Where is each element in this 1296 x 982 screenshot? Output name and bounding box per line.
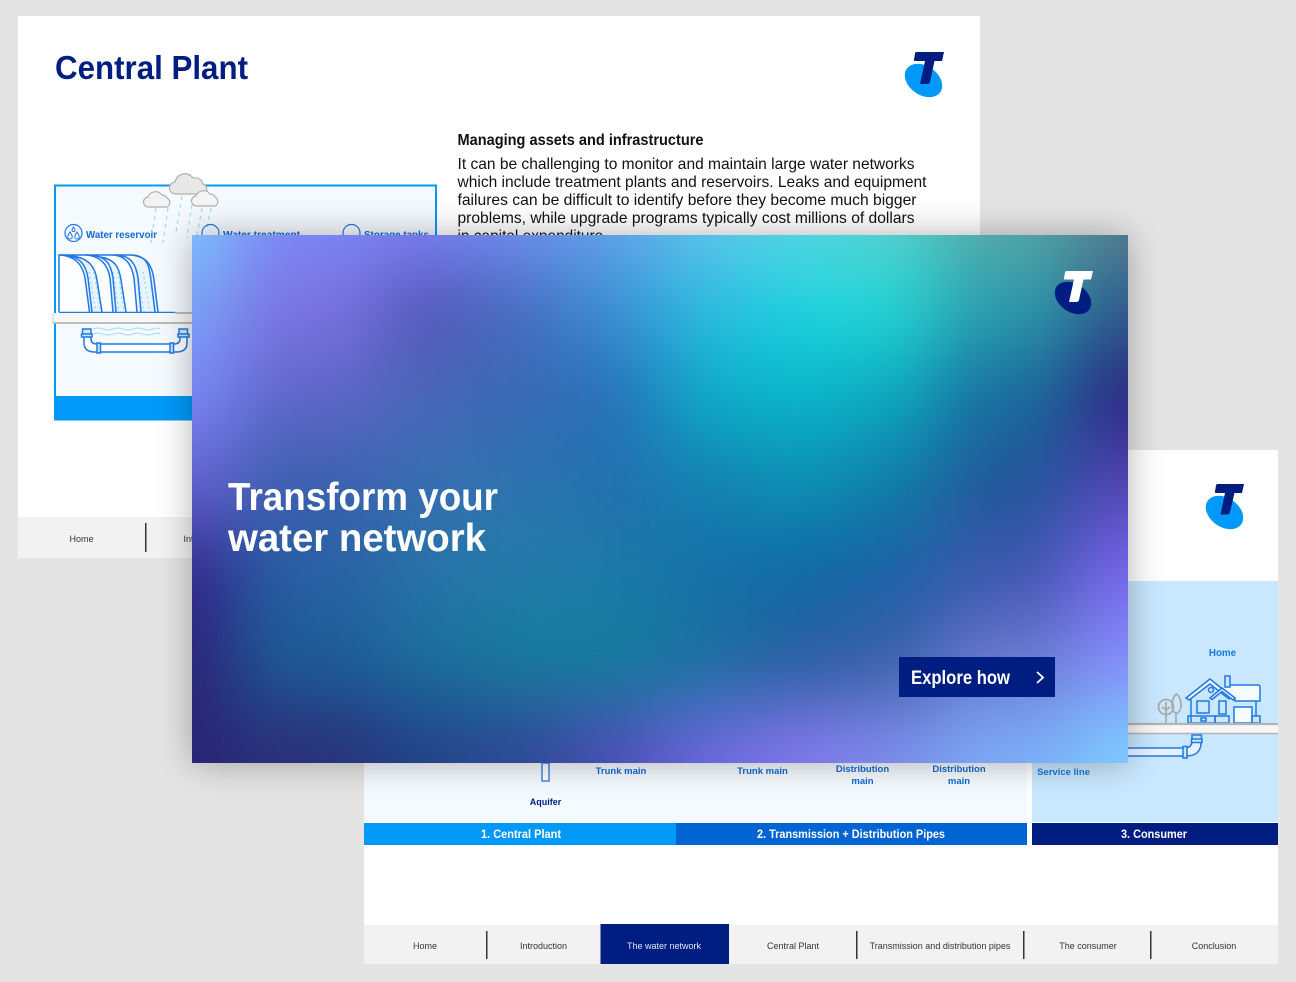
button: explore how: Explore how (911, 668, 1010, 689)
navigation: water network slide: Home (413, 941, 437, 951)
diagram background (364, 581, 1027, 822)
labels: pipes (596, 764, 1090, 787)
icon: reservoir dam (59, 255, 175, 312)
labels: pipes: main (851, 776, 874, 787)
navigation: water network slide: Conclusion (1192, 941, 1236, 951)
label: storage tanks: Storage tanks (364, 230, 429, 241)
icon: pipe (82, 329, 189, 353)
icon: chevron (1037, 672, 1043, 683)
diagram: central plant panel (53, 174, 437, 420)
navigation: water network slide: Transmission and distribution pipes (870, 941, 1011, 951)
label: aquifer well: Aquifer (530, 797, 562, 807)
navigation: central plant slide: Introduction (183, 534, 231, 544)
title: transform your water network: water network (227, 517, 486, 560)
consumer panel (1032, 581, 1278, 822)
section bar: central plant (364, 823, 676, 845)
label: home: Home (1209, 648, 1237, 659)
label: storage tanks (343, 224, 429, 242)
panel: hero gradient (192, 235, 1128, 763)
navigation: water network slide: Central Plant (767, 941, 820, 951)
navigation: central plant slide (18, 517, 980, 558)
text block: managing assets: failures can be difficult to identify before they become much bigger (458, 192, 917, 209)
icon: clouds and rain (143, 174, 218, 243)
label: water reservoir (65, 224, 157, 242)
section bar: transmission (676, 823, 1027, 845)
labels: pipes: Trunk main (596, 766, 647, 777)
label: water reservoir: Water reservoir (86, 230, 157, 241)
navigation: water network slide (364, 924, 1278, 964)
logo: Telstra top (898, 52, 949, 104)
text block: managing assets: It can be challenging to monitor and maintain large water networks (458, 156, 914, 173)
labels: pipes: Distribution (836, 764, 889, 775)
title: transform your water network: Transform your (228, 476, 498, 519)
ground strip (53, 313, 193, 323)
section bar: consumer (1032, 823, 1278, 845)
icon: trees (1158, 694, 1181, 723)
hero shadow (192, 235, 1128, 763)
gradient mesh (192, 235, 1128, 763)
label: water treatment: Water treatment (223, 230, 301, 241)
section bar: central plant: 1. Central Plant (481, 829, 561, 841)
labels: pipes: Distribution (932, 764, 986, 775)
button: explore how (899, 657, 1055, 697)
ground strip (1110, 724, 1278, 734)
icon: service pipe (1120, 735, 1202, 758)
labels: pipes: Service line (1037, 767, 1090, 778)
title: transform your water network (227, 476, 498, 560)
icon: water surface (93, 328, 160, 335)
labels: pipes: Trunk main (737, 766, 788, 777)
logo: Telstra on hero (1049, 271, 1097, 321)
navigation: water network slide: The consumer (1059, 941, 1117, 951)
text block: managing assets: Managing assets and infrastructure (458, 132, 704, 149)
panel: central plant slide (18, 16, 980, 558)
labels: pipes: main (948, 776, 970, 787)
panel: water network slide (364, 450, 1278, 964)
heading: Central Plant: Central Plant (55, 49, 248, 86)
section bar: consumer: 3. Consumer (1121, 829, 1187, 841)
label: water treatment (202, 224, 301, 242)
logo: Telstra lower (1199, 484, 1250, 536)
text block: managing assets (457, 132, 927, 245)
navigation: central plant slide: Home (69, 534, 94, 544)
section bar: transmission: 2. Transmission + Distribution Pipes (757, 829, 945, 841)
text block: managing assets: problems, while upgrade programs typically cost millions of dollars (458, 210, 914, 227)
text block: managing assets: which include treatment plants and reservoirs. Leaks and equipment (457, 174, 927, 191)
navigation: water network slide: The water network (627, 941, 702, 951)
label: aquifer well (530, 763, 562, 807)
text block: managing assets: in capital expenditure. (458, 228, 608, 245)
navigation: water network slide: Introduction (520, 941, 567, 951)
icon: house (1186, 676, 1260, 723)
